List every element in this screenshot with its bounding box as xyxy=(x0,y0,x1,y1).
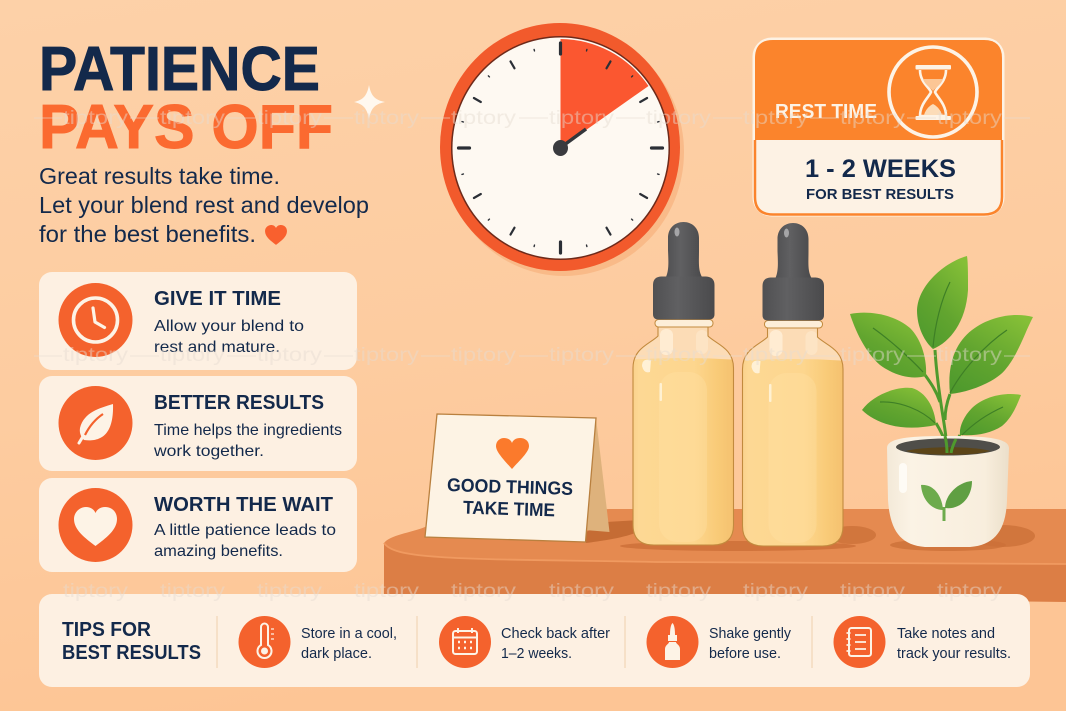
icon: sparkle xyxy=(354,85,385,119)
watermark: tiptory xyxy=(257,581,323,602)
clock illustration xyxy=(440,23,684,276)
text: give it time xyxy=(154,318,304,356)
icon: heart xyxy=(58,488,132,562)
text: shake: before use. xyxy=(709,646,781,662)
watermark: tiptory xyxy=(63,581,129,602)
intro text: for the best benefits. xyxy=(39,221,256,247)
text: notes: track your results. xyxy=(897,646,1011,662)
watermark: tiptory xyxy=(160,108,226,129)
text: store: dark place. xyxy=(301,646,372,662)
title xyxy=(39,35,333,162)
text: worth the wait: A little patience leads to xyxy=(154,522,336,539)
panel: worth the wait xyxy=(39,478,357,572)
text: check xyxy=(501,626,610,662)
watermark: tiptory xyxy=(743,108,809,129)
icon: hourglass xyxy=(889,47,977,137)
text: notes: Take notes and xyxy=(897,626,995,642)
watermark xyxy=(34,108,1030,602)
intro text: Let your blend rest and develop xyxy=(39,192,369,218)
heading: tips xyxy=(62,619,201,664)
watermark: tiptory xyxy=(451,581,517,602)
bottle: left xyxy=(632,222,734,546)
text: worth the wait xyxy=(154,522,336,560)
text: better results xyxy=(153,422,342,460)
icon: clock xyxy=(58,283,132,357)
panel: tips for best results xyxy=(39,594,1030,687)
text: worth the wait: amazing benefits. xyxy=(154,543,283,560)
card text xyxy=(447,474,573,520)
panel: better results xyxy=(39,376,357,471)
title: PATIENCE xyxy=(39,35,320,104)
watermark: tiptory xyxy=(840,345,906,366)
heading: worth the wait: WORTH THE WAIT xyxy=(154,494,333,516)
caption: for best results: FOR BEST RESULTS xyxy=(806,186,954,203)
icon: dropper bottle xyxy=(646,616,698,668)
icon: leaf xyxy=(58,386,132,460)
icon: small heart xyxy=(265,225,287,245)
text: give it time: rest and mature. xyxy=(154,339,280,356)
tent card xyxy=(425,414,610,542)
text: store: Store in a cool, xyxy=(301,626,397,642)
leaves and stems xyxy=(850,256,1033,451)
shelf xyxy=(384,509,1066,602)
card text: GOOD THINGS xyxy=(447,474,573,499)
watermark: tiptory xyxy=(937,581,1003,602)
text: check: 1–2 weeks. xyxy=(501,646,572,662)
heading: better results: BETTER RESULTS xyxy=(154,392,324,414)
watermark: tiptory xyxy=(257,108,323,129)
watermark: tiptory xyxy=(63,345,129,366)
title: PAYS OFF xyxy=(39,93,333,162)
watermark: tiptory xyxy=(646,581,712,602)
heading: tips: BEST RESULTS xyxy=(62,642,201,664)
text: store xyxy=(301,626,397,662)
watermark: tiptory xyxy=(160,345,226,366)
watermark: tiptory xyxy=(840,108,906,129)
text: notes xyxy=(897,626,1011,662)
icon: notebook xyxy=(834,616,886,668)
watermark: tiptory xyxy=(549,108,615,129)
watermark: tiptory xyxy=(840,581,906,602)
plant in pot xyxy=(850,256,1033,547)
heading: give it time: GIVE IT TIME xyxy=(154,288,281,310)
watermark: tiptory xyxy=(646,345,712,366)
panel: give it time xyxy=(39,272,357,370)
text: check: Check back after xyxy=(501,626,610,642)
bottle: right xyxy=(742,223,844,546)
label: rest time: REST TIME xyxy=(775,101,877,123)
text: better results: Time helps the ingredients xyxy=(154,422,342,439)
watermark: tiptory xyxy=(549,581,615,602)
pot logo xyxy=(921,481,972,521)
watermark: tiptory xyxy=(937,108,1003,129)
value: weeks: 1 - 2 WEEKS xyxy=(805,155,956,183)
watermark: tiptory xyxy=(743,581,809,602)
watermark: tiptory xyxy=(451,345,517,366)
heading: tips: TIPS FOR xyxy=(62,619,152,641)
watermark: tiptory xyxy=(354,345,420,366)
text: better results: work together. xyxy=(153,443,264,460)
watermark: tiptory xyxy=(354,581,420,602)
watermark: tiptory xyxy=(354,108,420,129)
pot xyxy=(887,436,1009,547)
watermark: tiptory xyxy=(646,108,712,129)
text: give it time: Allow your blend to xyxy=(154,318,304,335)
watermark: tiptory xyxy=(63,108,129,129)
text: shake xyxy=(709,626,792,662)
card text: TAKE TIME xyxy=(463,497,555,520)
icon: calendar xyxy=(439,616,491,668)
watermark: tiptory xyxy=(451,108,517,129)
watermark: tiptory xyxy=(549,345,615,366)
icon: thermometer xyxy=(238,616,290,668)
icon: card heart xyxy=(496,438,529,469)
watermark: tiptory xyxy=(160,581,226,602)
intro text: Great results take time. xyxy=(39,163,280,189)
text: shake: Shake gently xyxy=(709,626,792,642)
intro text xyxy=(39,163,369,247)
watermark: tiptory xyxy=(743,345,809,366)
watermark: tiptory xyxy=(257,345,323,366)
panel: rest time xyxy=(752,38,1004,216)
watermark: tiptory xyxy=(937,345,1003,366)
